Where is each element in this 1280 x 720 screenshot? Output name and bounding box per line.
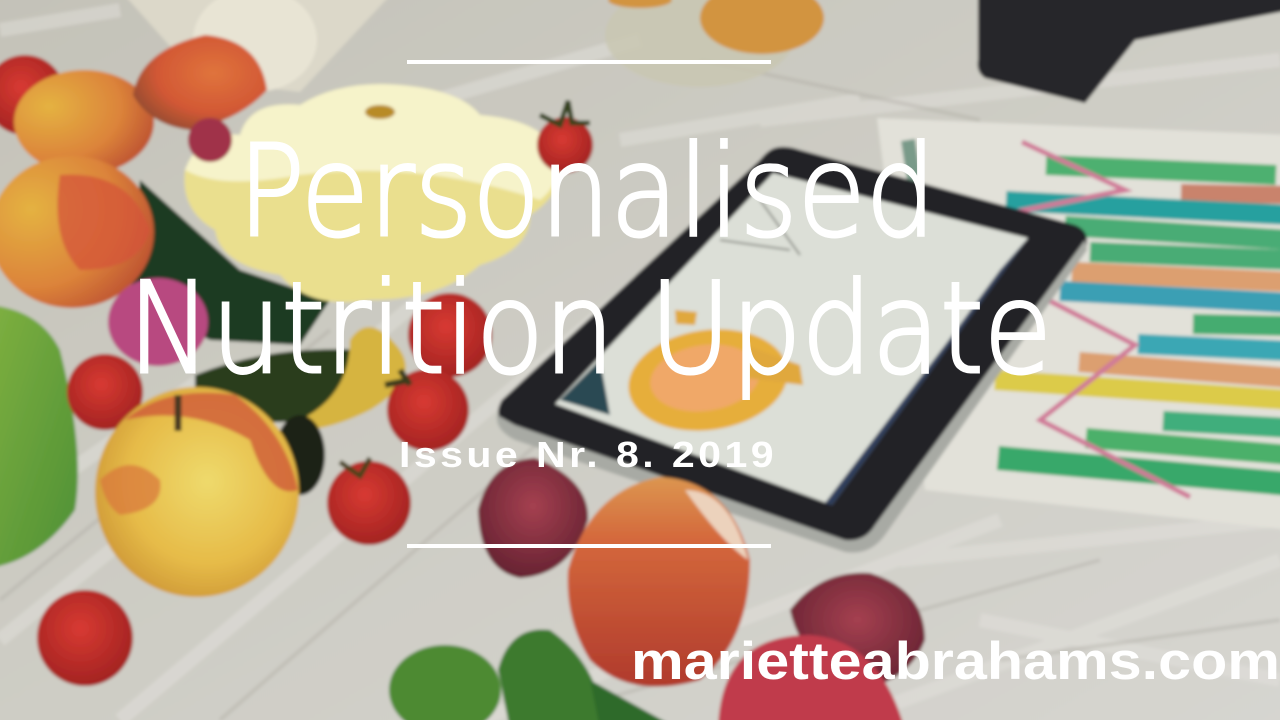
title: Nutrition Update [128, 255, 1052, 402]
donut chart on tablet [622, 310, 803, 441]
dark greens behind squash [130, 180, 330, 345]
fruits left [0, 35, 593, 686]
website: marietteabrahams.com [631, 632, 1280, 691]
tablet with nutrition chart [497, 147, 1087, 553]
bottom divider line [407, 544, 771, 548]
top divider line [407, 60, 771, 64]
squash [184, 84, 559, 302]
props at top of table [120, 0, 1280, 103]
fruits bottom [389, 458, 925, 720]
title [128, 118, 1052, 402]
paper chart [877, 118, 1280, 530]
issue line: Issue Nr. 8. 2019 [399, 434, 777, 475]
title: Personalised [238, 118, 936, 265]
